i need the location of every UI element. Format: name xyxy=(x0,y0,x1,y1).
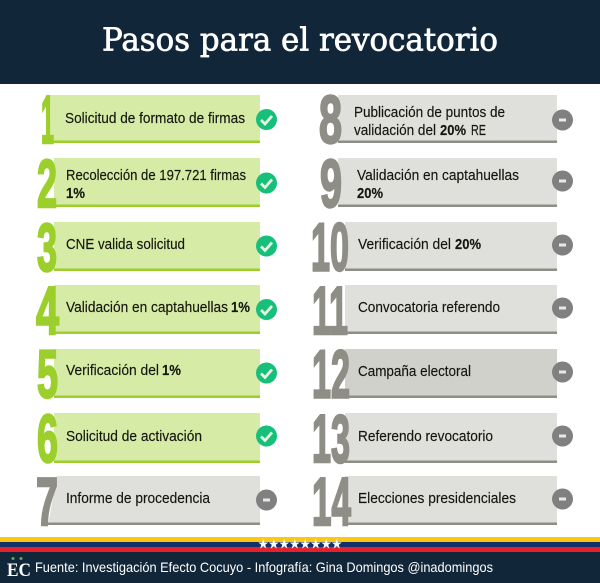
step 10: 20% xyxy=(455,236,481,253)
step 4: 1% xyxy=(231,299,250,316)
step 8: validación del xyxy=(354,122,436,139)
step 2 xyxy=(37,146,277,222)
step 11: Convocatoria referendo xyxy=(358,299,500,316)
step 8: 20% xyxy=(440,122,466,139)
title: Pasos para el revocatorio xyxy=(102,20,498,58)
step 12 xyxy=(312,336,573,412)
step 5: Verificación del xyxy=(66,362,159,379)
step 2: 1% xyxy=(66,185,85,202)
step 12: 12 xyxy=(312,336,350,412)
step 14: 14 xyxy=(312,464,351,540)
logo: EC: EC xyxy=(7,560,31,581)
step 4 xyxy=(36,273,277,349)
step 1: 1 xyxy=(41,82,54,158)
header band xyxy=(0,0,600,84)
step 5 xyxy=(37,336,277,412)
footer band xyxy=(0,552,600,583)
step 11 xyxy=(312,273,573,349)
step 9: 9 xyxy=(320,146,342,222)
step 4: 4 xyxy=(36,273,59,349)
flag stars: ★★★★★★★★ xyxy=(258,537,342,551)
step 8: RE xyxy=(471,122,486,139)
step 11: 11 xyxy=(312,273,348,349)
step 6: Solicitud de activación xyxy=(66,428,202,445)
step 5: 1% xyxy=(162,362,181,379)
flag stripes xyxy=(0,537,600,552)
footer source credit: Fuente: Investigación Efecto Cocuyo - Infografía: Gina Domingos @inadomingos xyxy=(35,559,493,575)
step 10: Verificación del xyxy=(358,236,451,253)
step 1 xyxy=(41,82,277,158)
step 3: CNE valida solicitud xyxy=(66,236,185,253)
step 1: Solicitud de formato de firmas xyxy=(65,110,245,127)
step 9: Validación en captahuellas xyxy=(357,167,519,184)
step 12: Campaña electoral xyxy=(358,363,471,380)
step 13: Referendo revocatorio xyxy=(358,428,493,445)
step 3 xyxy=(37,210,277,286)
step 14: Elecciones presidenciales xyxy=(358,490,516,507)
step 2: 2 xyxy=(37,146,57,222)
step 6 xyxy=(37,401,277,477)
step 13: 13 xyxy=(312,401,350,477)
step 8: 8 xyxy=(319,82,342,158)
step 9: 20% xyxy=(357,185,383,202)
step 3: 3 xyxy=(37,210,57,286)
step 10: 10 xyxy=(311,210,349,286)
step 2: Recolección de 197.721 firmas xyxy=(66,167,246,184)
step 8 xyxy=(319,82,573,158)
step 4: Validación en captahuellas xyxy=(66,299,228,316)
step 5: 5 xyxy=(37,336,58,412)
step 7: 7 xyxy=(36,464,58,540)
step 9 xyxy=(320,146,573,222)
step 6: 6 xyxy=(37,401,58,477)
step 10 xyxy=(311,210,573,286)
step 7 xyxy=(36,464,277,540)
step 8: Publicación de puntos de xyxy=(354,104,505,121)
step 13 xyxy=(312,401,573,477)
step 7: Informe de procedencia xyxy=(66,490,211,507)
step 14 xyxy=(312,464,573,540)
